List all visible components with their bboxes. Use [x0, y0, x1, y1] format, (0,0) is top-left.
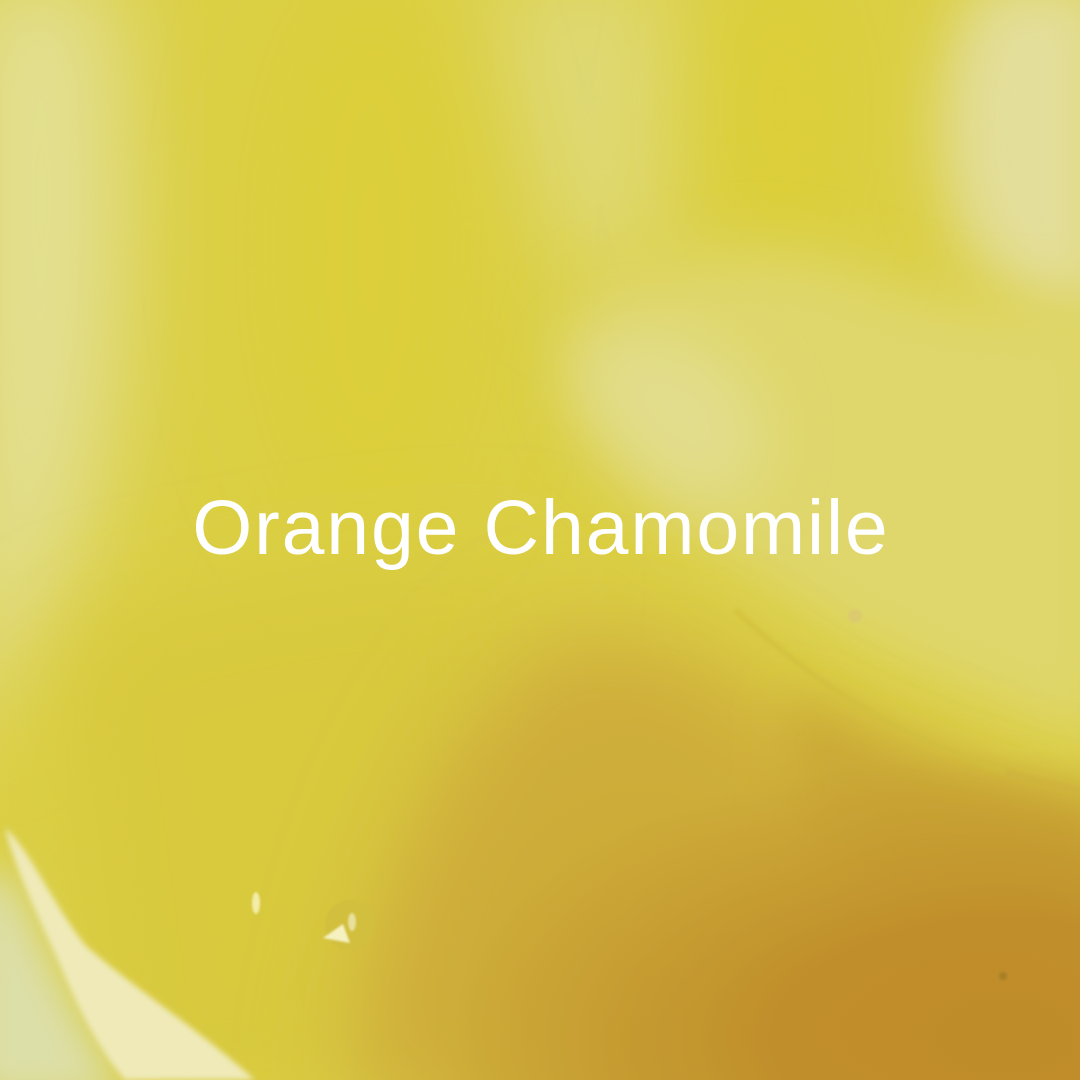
orange edge below liquid rim: [786, 690, 1080, 900]
orange mid tone at bottom centre: [300, 640, 1080, 1080]
pale top band: [480, 0, 681, 284]
pale yellow swirl along right: [563, 251, 1080, 750]
curved liquid rim: [735, 610, 1080, 790]
pale left band: [0, 0, 123, 740]
title: Orange Chamomile: [192, 485, 890, 571]
deep yellow columns: [260, 0, 850, 540]
pale center blob: [575, 331, 765, 502]
mid yellow lower left: [60, 560, 540, 1080]
orange gradient: broad mid tone: [340, 628, 1080, 1080]
cream wedge bottom left: [5, 828, 255, 1080]
pale right blob: [941, 0, 1080, 320]
pale bottom-left corner glow: [0, 850, 130, 1080]
small bubbles: [252, 609, 1007, 980]
deep orange lower right: [440, 740, 1080, 1080]
